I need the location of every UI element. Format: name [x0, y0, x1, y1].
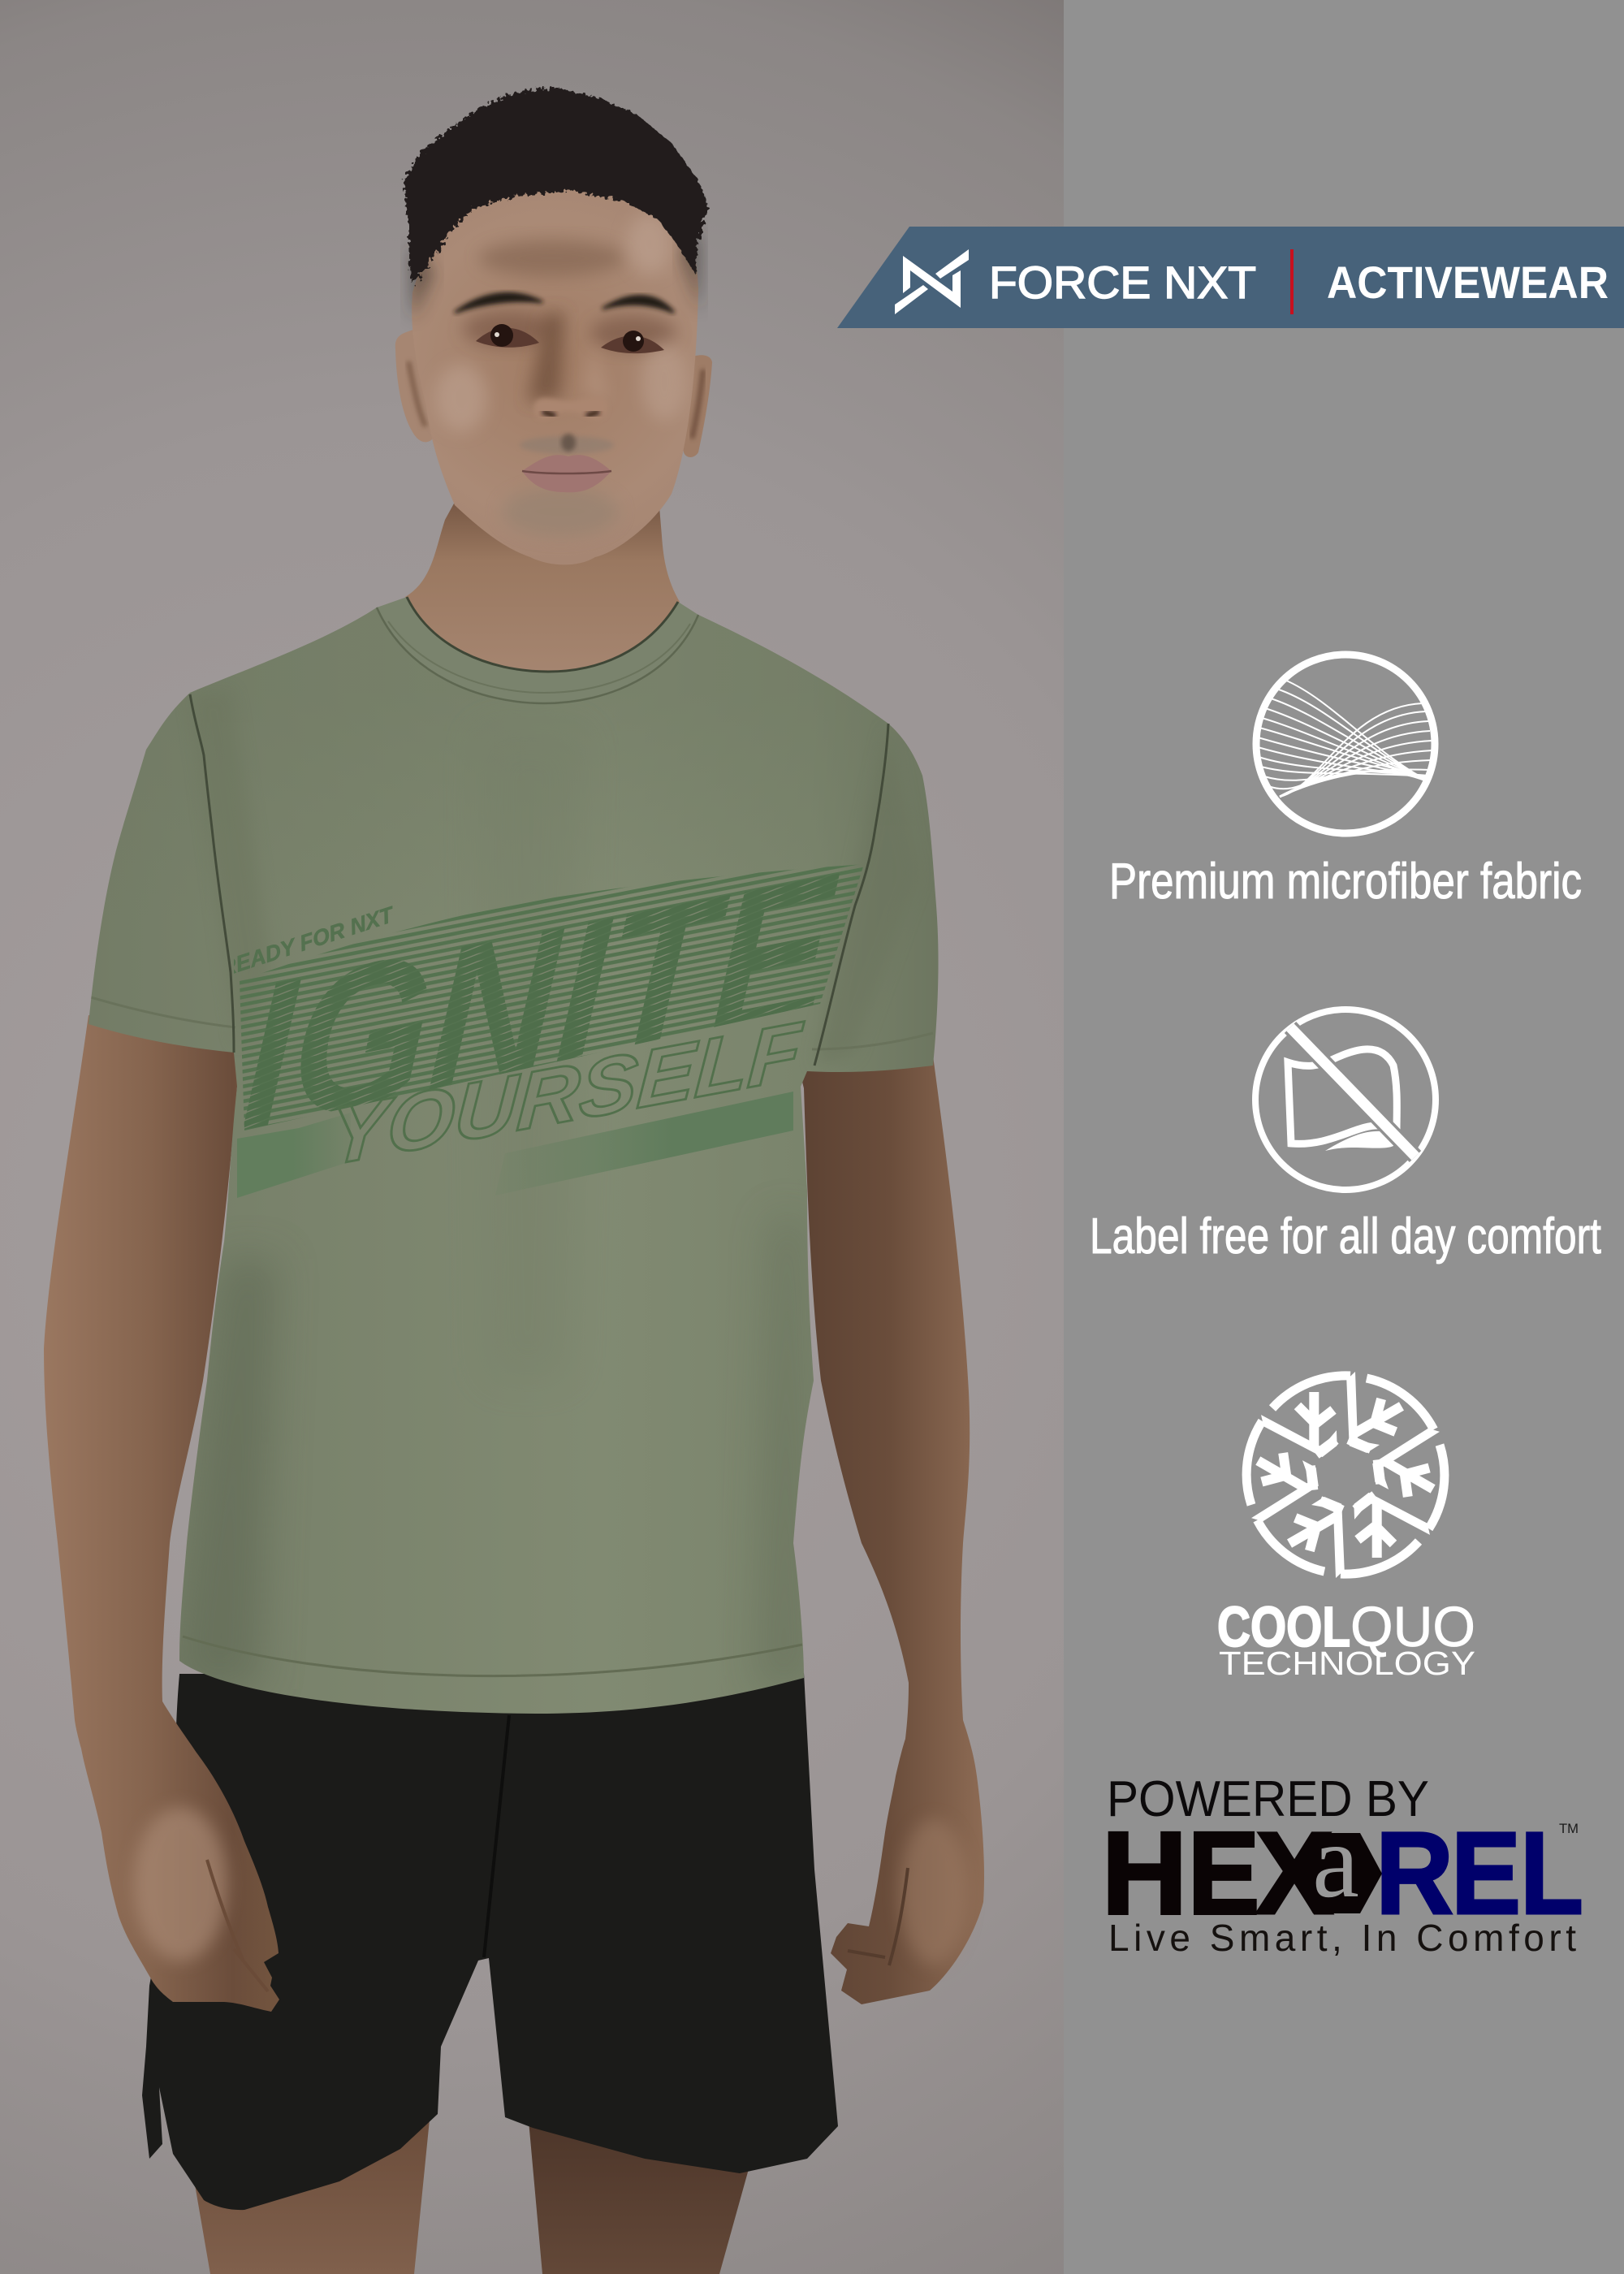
brand banner [837, 227, 1624, 328]
hair [404, 88, 708, 284]
shirt print [240, 864, 863, 1131]
COOL wordmark: COOL [1217, 1595, 1350, 1658]
left ear [395, 329, 445, 442]
legs [195, 2112, 751, 2274]
HEX wordmark: X [1255, 1808, 1333, 1939]
icon: force nxt logo mark [895, 249, 969, 314]
POWERED BY text: POWERED BY [1107, 1771, 1429, 1827]
powered by hexarel logo [1102, 1771, 1583, 1959]
trademark: TM [1559, 1821, 1579, 1836]
cheek highlights [435, 364, 487, 432]
right arm and hand [796, 1056, 984, 2004]
head [395, 88, 712, 564]
ACTIVEWEAR heading: ACTIVEWEAR [1327, 257, 1609, 308]
nose bridge shading [528, 313, 564, 402]
red divider [1290, 249, 1294, 314]
face [412, 175, 698, 564]
FORCE NXT wordmark: FORCE NXT [989, 257, 1256, 308]
HEX wordmark [1102, 1808, 1382, 1939]
beard shadow [502, 487, 619, 536]
neck [405, 487, 680, 672]
black shorts [142, 1673, 838, 2210]
REL wordmark: L [1520, 1808, 1583, 1939]
REL wordmark: E [1451, 1808, 1521, 1939]
feature: coolquo technology [1217, 1360, 1475, 1682]
lips [522, 455, 611, 492]
HEX wordmark: E [1188, 1808, 1259, 1939]
YOURSELF outline text: YOURSELF [327, 1005, 806, 1183]
REL wordmark [1376, 1808, 1583, 1939]
print bar right [495, 1092, 793, 1195]
feature: label free [1090, 1009, 1601, 1265]
forehead shadow [479, 240, 625, 276]
eyes [476, 328, 539, 348]
shirt collar [377, 597, 698, 703]
nose [533, 397, 607, 419]
TECHNOLOGY text: TECHNOLOGY [1219, 1645, 1475, 1682]
QUO wordmark: QUO [1350, 1595, 1475, 1658]
hexagon letter a: a [1312, 1803, 1359, 1920]
model photo illustration [44, 88, 984, 2274]
shirt shading [81, 601, 942, 1689]
feature: premium microfiber fabric [1109, 655, 1582, 910]
eyebrows [455, 293, 542, 313]
photo background panel [0, 0, 1064, 2274]
olive t-shirt [81, 601, 942, 1714]
right grey panel [1064, 0, 1624, 2274]
eye socket shadow [463, 311, 552, 347]
print bar left [237, 1113, 351, 1198]
icon: no label [1255, 1009, 1436, 1190]
sleeve seams [190, 694, 888, 1066]
banner background [837, 227, 1624, 328]
thin stripe field [240, 864, 863, 1131]
READY FOR NXT text: READY FOR NXT [218, 901, 397, 982]
right ear [670, 355, 712, 457]
temple fade [410, 244, 434, 321]
icon: snowflake badge [1220, 1360, 1471, 1589]
IGNITE lettering: IGNITE [236, 828, 843, 1175]
tagline: Live Smart, In Comfort [1108, 1917, 1576, 1959]
HEX wordmark: H [1102, 1808, 1187, 1939]
left arm and hand [44, 1015, 279, 2012]
REL wordmark: R [1376, 1808, 1453, 1939]
icon: fabric weave [1256, 655, 1435, 833]
